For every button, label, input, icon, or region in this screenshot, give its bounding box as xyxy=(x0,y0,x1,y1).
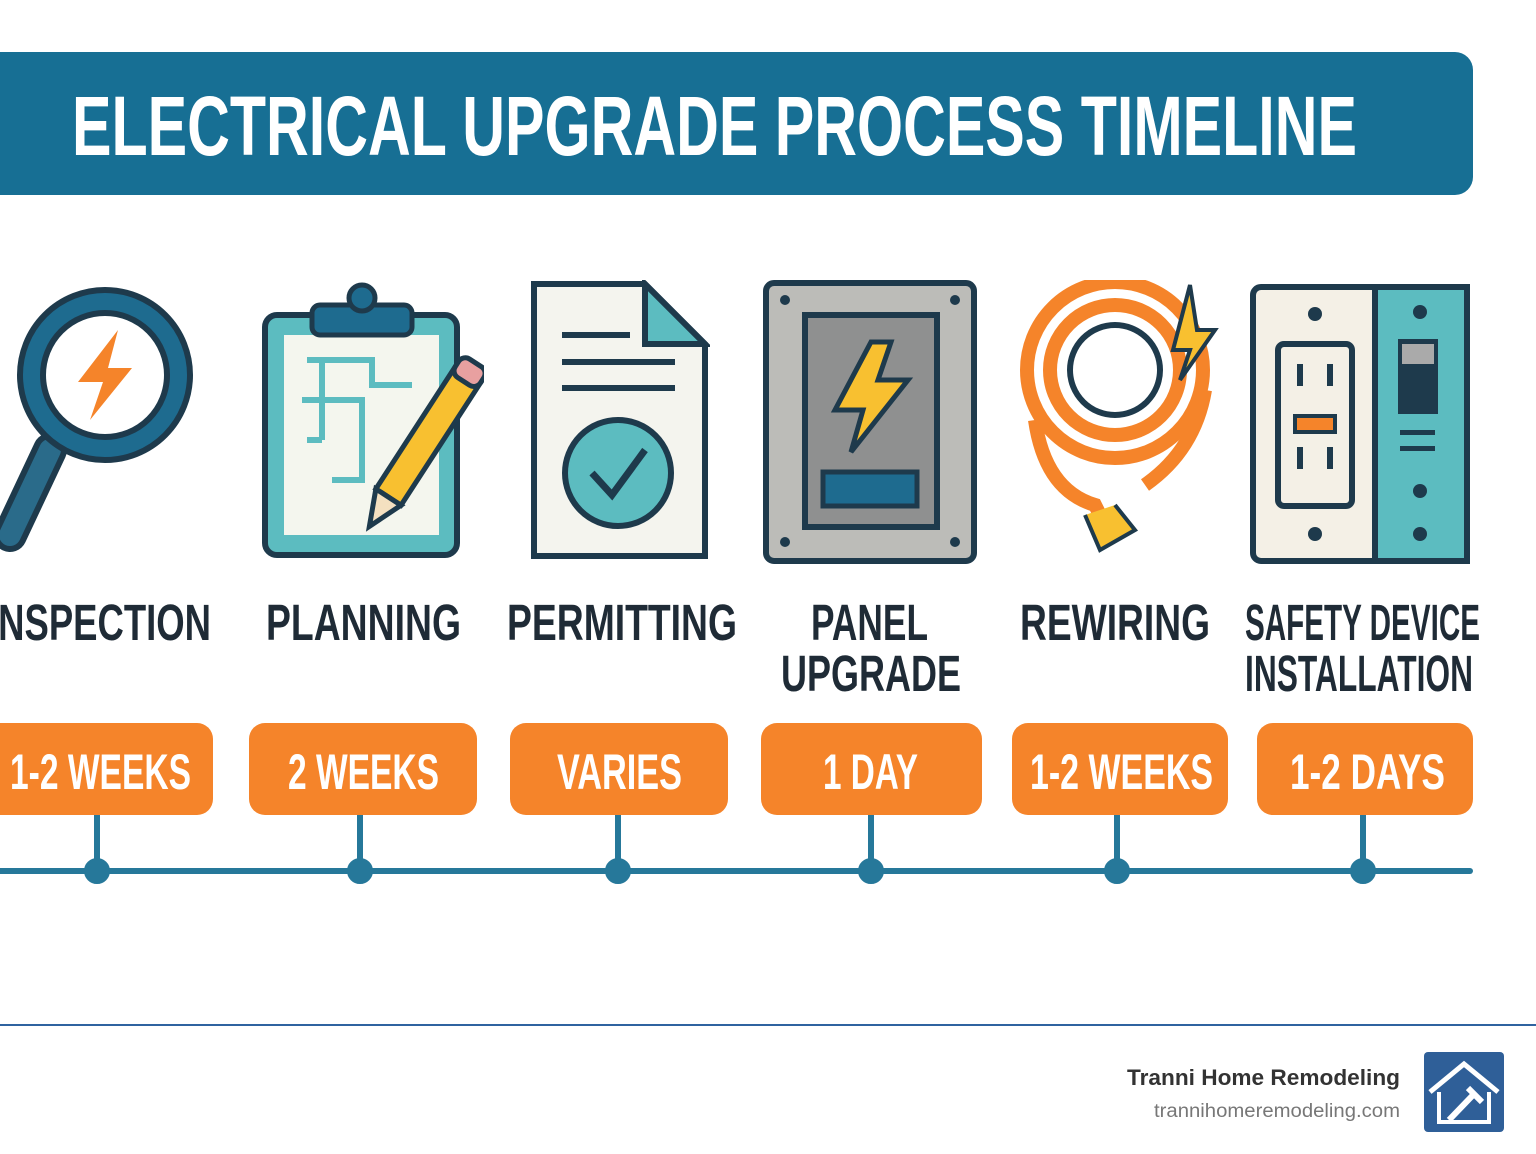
footer brand text: Tranni Home Remodeling xyxy=(1127,1065,1400,1090)
label: panel upgrade: PANEL xyxy=(811,594,928,651)
badge: varies xyxy=(510,723,728,815)
badge: 1-2 weeks xyxy=(0,723,213,815)
badge: 1-2 days xyxy=(1257,723,1473,815)
label: planning: PLANNING xyxy=(266,594,461,651)
label: safety device installation xyxy=(1245,594,1480,702)
footer brand text xyxy=(1127,1065,1400,1122)
title xyxy=(0,52,1473,195)
badge texts: 1-2 DAYS xyxy=(1290,744,1445,800)
icon: clipboard xyxy=(262,282,484,558)
icon: magnifier xyxy=(0,287,193,552)
badge: 1 day xyxy=(761,723,982,815)
badge texts: 1 DAY xyxy=(823,744,918,800)
label: permitting: PERMITTING xyxy=(507,594,737,651)
badge texts: 2 WEEKS xyxy=(288,744,439,800)
icon: electrical panel xyxy=(763,280,977,564)
badge texts xyxy=(10,744,1445,800)
badge texts: VARIES xyxy=(557,744,682,800)
badge texts: 1-2 WEEKS xyxy=(1030,744,1213,800)
badge texts: 1-2 WEEKS xyxy=(10,744,191,800)
icon: permit document xyxy=(531,280,710,559)
badge: 1-2 weeks rewiring xyxy=(1012,723,1228,815)
icon: wire coil xyxy=(1020,280,1219,553)
step labels xyxy=(0,594,1480,700)
logo xyxy=(1424,1052,1504,1132)
label: panel upgrade xyxy=(781,594,961,702)
badge: 2 weeks xyxy=(249,723,477,815)
footer brand text: trannihomeremodeling.com xyxy=(1154,1101,1400,1122)
icon: outlet and switch xyxy=(1250,284,1470,564)
timeline xyxy=(0,815,1473,884)
label: rewiring: REWIRING xyxy=(1020,594,1210,651)
